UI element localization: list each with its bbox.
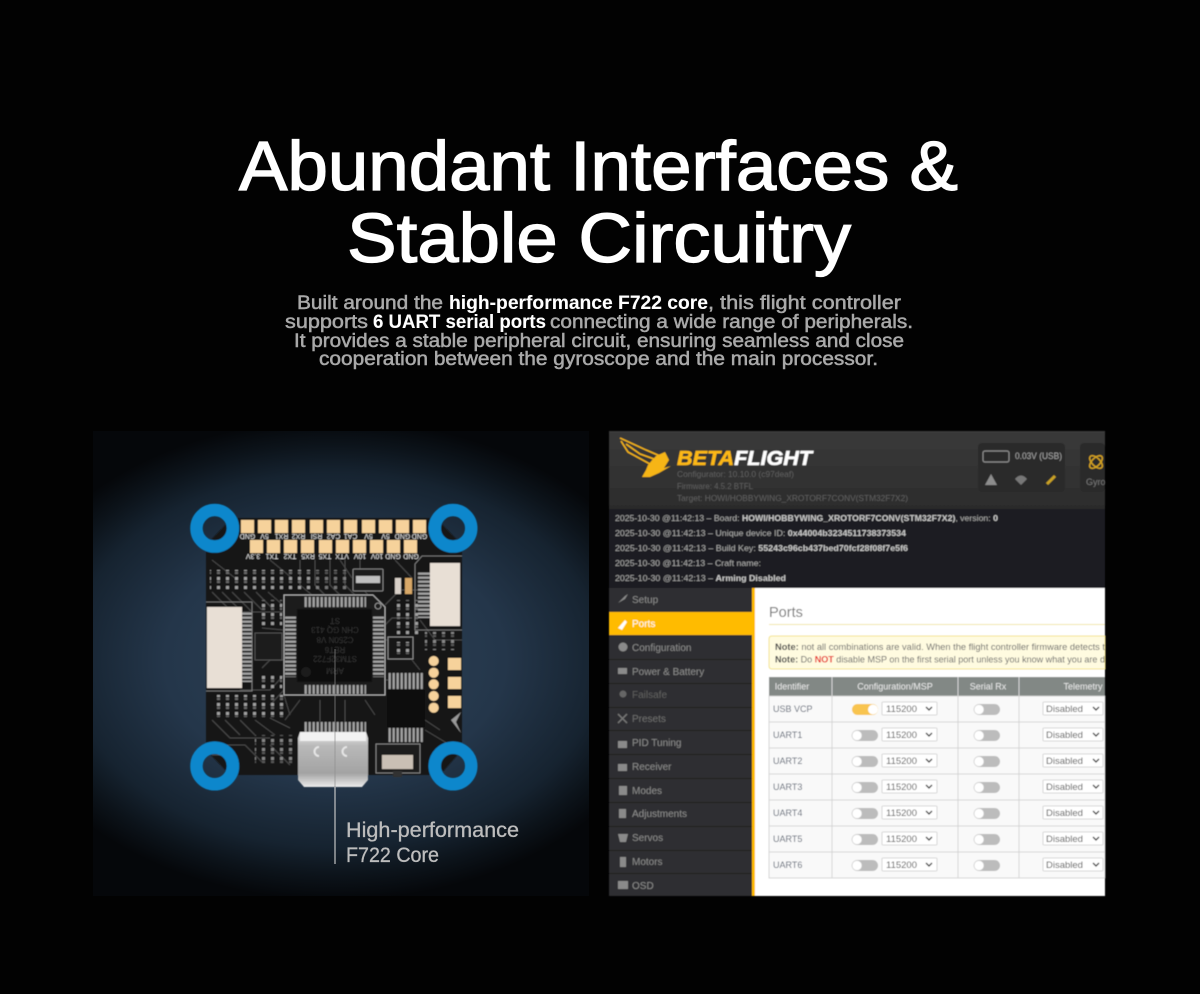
icon: link (1047, 476, 1055, 484)
pad labels: RX2 (292, 532, 305, 539)
ports content area (755, 588, 1105, 896)
pad labels: RSI (311, 532, 322, 539)
logo wordmark: BETAFLIGHT (677, 448, 814, 470)
menu labels: Configuration (632, 643, 691, 654)
row identifiers: UART2 (773, 756, 802, 766)
baud rate selects: 115200 (886, 834, 917, 845)
top solder pad rows (241, 520, 426, 553)
main processor: C250N V8 (316, 635, 353, 644)
menu labels: Servos (632, 833, 663, 844)
menu labels: Receiver (632, 762, 672, 773)
left connector (206, 602, 252, 691)
main processor (284, 595, 385, 695)
pad labels: 10V (370, 552, 383, 559)
version info: Firmware: 4.5.2 BTFL (677, 481, 753, 491)
telemetry selects: Disabled (1046, 834, 1083, 845)
intro text block: high-performance F722 core (449, 293, 708, 314)
baud rate selects: 115200 (886, 782, 917, 793)
title: Abundant Interfaces & (239, 127, 958, 205)
baud rate selects: 115200 (886, 730, 917, 741)
baud rate selects: 115200 (886, 860, 917, 871)
note box: Note: Do NOT disable MSP on the first serial port unless you know what you are d (775, 654, 1105, 664)
intro text block: Built around the (297, 293, 443, 314)
boot switch (376, 744, 420, 777)
menu labels: Adjustments (632, 809, 687, 820)
pad labels: TX5 (318, 552, 331, 559)
panel background (93, 431, 589, 896)
telemetry selects: Disabled (1046, 730, 1083, 741)
ports heading: Ports (769, 605, 803, 621)
intro text block: supports (285, 312, 368, 333)
baud rate selects (882, 702, 937, 871)
intro text block (285, 293, 913, 370)
row identifiers: UART6 (773, 860, 802, 870)
ports table (769, 677, 1105, 878)
version info: Configurator: 10.10.0 (c97deaf) (677, 469, 794, 479)
baud rate selects: 115200 (886, 704, 917, 715)
pad labels: GND (395, 532, 410, 539)
pad labels: 5V (364, 532, 373, 539)
main processor: STM32F722 (312, 654, 357, 663)
intro text block: 6 UART serial ports (373, 312, 546, 333)
pad labels (240, 532, 427, 559)
intro text block: , this flight controller (708, 293, 902, 314)
pad labels: GND (385, 552, 401, 559)
note box: Note: not all combinations are valid. When the flight controller firmware detects t (775, 642, 1106, 652)
baud rate selects: 115200 (886, 808, 917, 819)
copper traces (212, 560, 462, 765)
panel: Betaflight configurator screenshot (609, 431, 1106, 896)
right connector (415, 556, 462, 630)
table header (769, 677, 1105, 696)
intro text block: It provides a stable peripheral circuit, ensuring seamless and close (294, 331, 904, 352)
menu labels: Setup (632, 595, 659, 606)
pad labels: TX2 (283, 552, 296, 559)
main processor: CHN GQ 413 (311, 625, 359, 634)
intro text block: connecting a wide range of peripherals. (550, 312, 913, 333)
pad labels: TX1 (265, 552, 278, 559)
main processor: RET6 (324, 645, 345, 654)
pad labels: VTX (335, 552, 349, 559)
row identifiers: UART3 (773, 782, 802, 792)
row identifiers: UART1 (773, 730, 802, 740)
telemetry selects (1043, 702, 1103, 871)
log lines: 2025-10-30 @11:42:13 – Arming Disabled (615, 573, 786, 583)
callout text (346, 819, 519, 867)
menu labels (632, 595, 704, 892)
small components (210, 569, 457, 765)
menu labels: Presets (632, 714, 666, 725)
title: Stable Circuitry (347, 199, 851, 277)
log lines: 2025-10-30 @11:42:13 – Unique device ID: 0x44004b3234511738373534 (615, 528, 906, 538)
log lines: 2025-10-30 @11:42:13 – Craft name: (615, 558, 761, 568)
menu labels: Ports (632, 619, 655, 630)
pad labels: GND (240, 532, 255, 539)
log lines: 2025-10-30 @11:42:13 – Build Key: 55243c96cb437bed70fcf28f08f7e5f6 (615, 543, 908, 553)
menu labels: Motors (632, 857, 663, 868)
log lines: 2025-10-30 @11:42:13 – Board: HOWI/HOBBYWING_XROTORF7CONV(STM32F7X2) , version: 0 (615, 513, 998, 523)
telemetry selects: Disabled (1046, 808, 1083, 819)
row identifiers (773, 704, 813, 870)
telemetry selects: Disabled (1046, 756, 1083, 767)
callout text: F722 Core (346, 844, 439, 867)
menu labels: Modes (632, 786, 662, 797)
pad labels: 5V (260, 532, 269, 539)
panel: flight controller photo (93, 431, 589, 896)
header bar (609, 431, 1105, 509)
menu labels: PID Tuning (632, 738, 681, 749)
menu labels: OSD (632, 881, 654, 892)
version info (677, 469, 908, 503)
log panel (609, 509, 1105, 588)
MSP toggles (852, 704, 878, 871)
battery status box (978, 443, 1065, 492)
icon: bee (620, 438, 671, 477)
telemetry selects: Disabled (1046, 782, 1083, 793)
yellow divider (752, 588, 755, 896)
main processor: ST (330, 616, 340, 625)
pad labels: 10V (353, 552, 366, 559)
right side pads (429, 656, 461, 733)
pad labels: RX5 (301, 552, 315, 559)
mounting holes (196, 510, 471, 784)
board outline (206, 518, 462, 775)
gyro status box (1080, 443, 1106, 492)
small chips (255, 633, 425, 742)
pad labels: 5V (381, 532, 390, 539)
title (239, 127, 958, 277)
row identifiers: UART4 (773, 808, 802, 818)
intro text block: cooperation between the gyroscope and the main processor. (319, 349, 878, 370)
battery status box: 0.03V (USB) (1015, 451, 1062, 461)
table rows (769, 696, 1105, 878)
gyro status box: Gyro (1086, 477, 1106, 487)
flight controller board (196, 510, 471, 787)
ports table: Configuration/MSP (857, 682, 933, 692)
telemetry selects: Disabled (1046, 860, 1083, 871)
baud rate selects: 115200 (886, 756, 917, 767)
row identifiers: USB VCP (773, 704, 813, 714)
menu icons (618, 594, 628, 889)
main processor: ARM (326, 666, 344, 675)
row identifiers: UART5 (773, 834, 802, 844)
pad labels: CA1 (344, 532, 357, 539)
callout text: High-performance (346, 819, 519, 842)
ports table: Telemetry (1063, 682, 1103, 692)
navigation sidebar (609, 588, 752, 896)
ports table: Identifier (775, 682, 809, 692)
active item: Ports (609, 612, 752, 635)
icon: warning (985, 474, 997, 485)
pad labels: CA2 (327, 532, 340, 539)
callout line (334, 649, 336, 787)
USB-C port (298, 722, 368, 787)
menu labels: Failsafe (632, 690, 667, 701)
pad labels: 3.3V (245, 552, 260, 559)
pad labels: RX1 (275, 532, 288, 539)
icon: failsafe (1015, 476, 1027, 485)
ports table: Serial Rx (970, 682, 1007, 692)
pad labels: GND (403, 552, 419, 559)
menu labels: Power & Battery (632, 667, 704, 678)
log lines (615, 513, 998, 583)
serial rx toggles (974, 704, 1000, 871)
icon: gyro (1088, 454, 1104, 470)
telemetry selects: Disabled (1046, 704, 1083, 715)
Betaflight logo (620, 438, 908, 503)
pad labels: GND (412, 532, 427, 539)
note box (769, 636, 1106, 669)
version info: Target: HOWI/HOBBYWING_XROTORF7CONV(STM32F7X2) (677, 493, 908, 503)
